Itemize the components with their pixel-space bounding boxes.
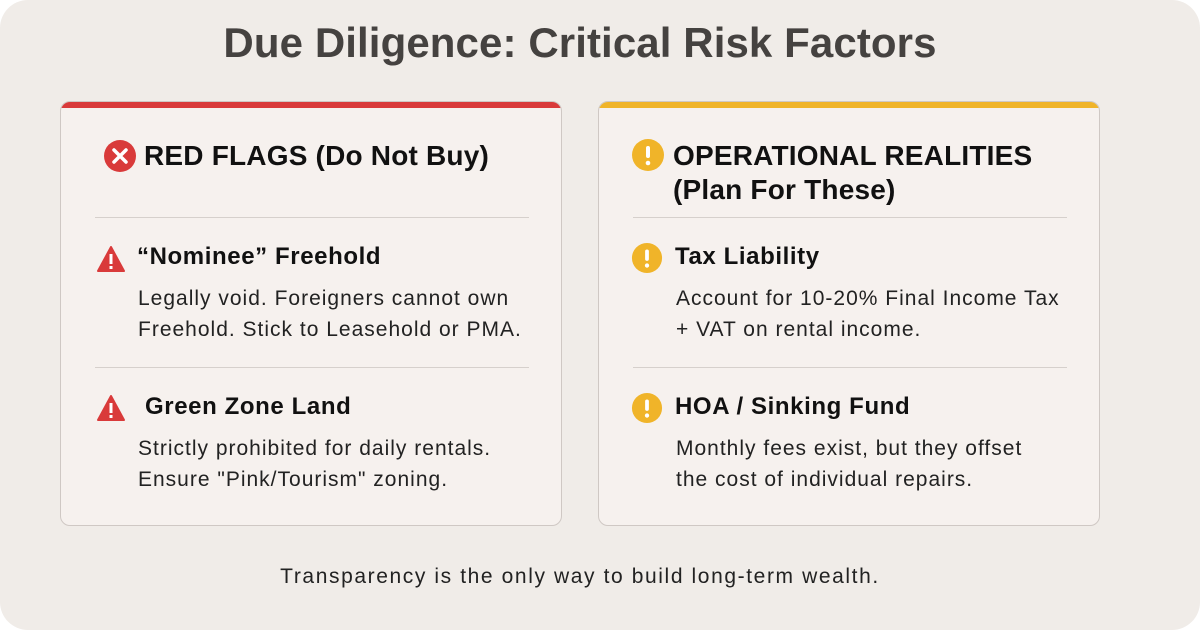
icon: yellow exclamation (632, 139, 664, 171)
icon: red x circle (104, 140, 136, 172)
heading: red flags: RED FLAGS (Do Not Buy) (144, 140, 489, 171)
text: tax (676, 287, 1060, 341)
icon: warning triangle 2 (97, 395, 125, 421)
icon: warning triangle (97, 246, 125, 272)
icon: exclamation hoa (632, 393, 662, 423)
item: green zone: Green Zone Land (145, 393, 351, 420)
text: tax: + VAT on rental income. (676, 318, 921, 341)
heading: operational: (Plan For These) (673, 174, 896, 205)
text: hoa (676, 437, 1022, 491)
text: nominee: Legally void. Foreigners cannot own (138, 287, 509, 310)
text: nominee: Freehold. Stick to Leasehold or PMA. (138, 318, 522, 341)
footer text: Transparency is the only way to build long-term wealth. (280, 565, 880, 588)
text: green zone: Ensure "Pink/Tourism" zoning. (138, 468, 448, 491)
icon: exclamation tax (632, 243, 662, 273)
heading: operational: OPERATIONAL REALITIES (673, 140, 1032, 171)
item: nominee freehold: “Nominee” Freehold (137, 243, 381, 270)
text: hoa: Monthly fees exist, but they offset (676, 437, 1022, 460)
text: hoa: the cost of individual repairs. (676, 468, 973, 491)
title: Due Diligence: Critical Risk Factors (223, 19, 937, 66)
panel: red flags (60, 101, 562, 526)
text: green zone (138, 437, 491, 491)
item: hoa: HOA / Sinking Fund (675, 393, 910, 420)
heading: operational (673, 140, 1032, 205)
text: nominee (138, 287, 522, 341)
item: tax: Tax Liability (675, 243, 820, 270)
text: green zone: Strictly prohibited for daily rentals. (138, 437, 491, 460)
text: tax: Account for 10-20% Final Income Tax (676, 287, 1060, 310)
panel: operational realities (598, 101, 1100, 526)
